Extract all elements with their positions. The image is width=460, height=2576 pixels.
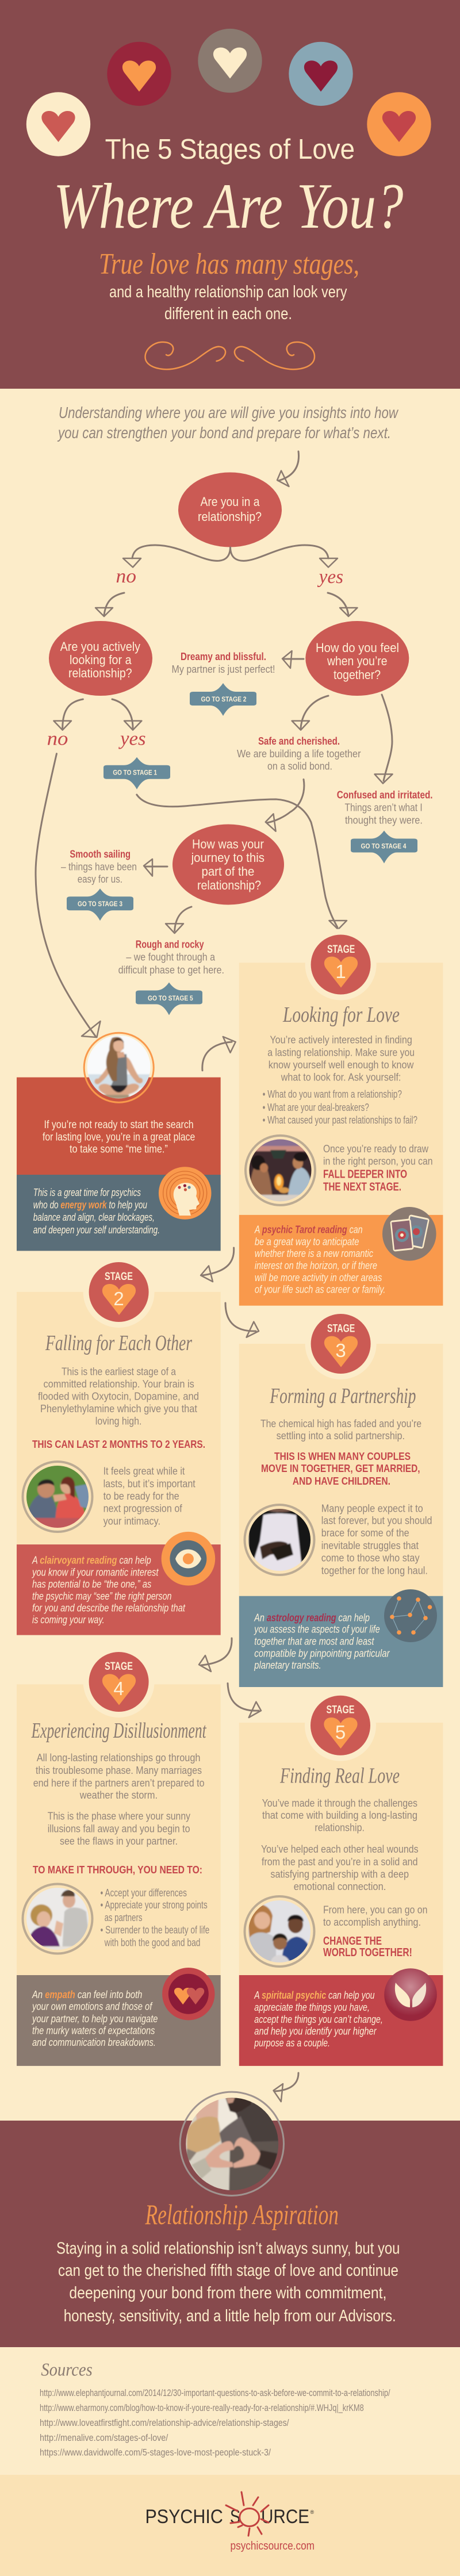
text: energy work: balance and align, clear blockages, xyxy=(33,1212,155,1223)
text: stage 2 intro: Phenylethylamine which give you that xyxy=(40,1402,197,1414)
logo: psychic source xyxy=(145,2492,315,2552)
flow question: how do you feel: How do you feel xyxy=(316,641,399,655)
stage badge 3 xyxy=(305,1308,377,1379)
list: source urls: http://www.eharmony.com/blog/how-to-know-if-youre-really-ready-for-a-relationship/#.WHJq|_krKM8 xyxy=(40,2403,364,2413)
text: stage 2 intro: committed relationship. Your brain is xyxy=(44,1378,194,1390)
list: source urls: http://menalive.com/stages-of-love/ xyxy=(40,2433,168,2443)
text: stage 4 intro: This is the phase where your sunny xyxy=(48,1810,191,1822)
flow question: actively looking: Are you actively xyxy=(60,639,140,654)
logo: psychic source: PSYCHIC xyxy=(145,2506,223,2528)
text: tarot reading: of your life such as career or family. xyxy=(255,1284,385,1295)
panel: stage 3 forming a partnership xyxy=(239,1308,443,1687)
text: empath: the murky waters of expectations xyxy=(32,2025,155,2037)
text: stage 4 intro: All long-lasting relationships go through xyxy=(37,1751,201,1764)
text: fall deeper: Once you’re ready to draw xyxy=(323,1143,429,1155)
text: fall deeper: in the right person, you can xyxy=(323,1155,433,1167)
icon: tarot cards xyxy=(382,1207,436,1261)
answer: rough and rocky: difficult phase to get here. xyxy=(118,964,224,976)
text: stage 4 intro xyxy=(33,1751,205,1847)
label: yes: yes xyxy=(317,566,343,588)
text: stage 1 intro: know yourself well enough to know xyxy=(269,1059,414,1071)
badge: go to stage 2 xyxy=(190,683,256,716)
header panel xyxy=(0,0,460,389)
heading: finding real love: Finding Real Love xyxy=(279,1764,400,1788)
callout: move in together xyxy=(261,1450,420,1487)
flow question: journey: How was your xyxy=(192,837,264,851)
arrow: actively yes xyxy=(112,699,141,730)
text: stage 2 intro: This is the earliest stage of a xyxy=(62,1365,177,1377)
list: source urls: https://www.davidwolfe.com/5-stages-love-most-people-stuck-3/ xyxy=(40,2448,271,2458)
text: me time: to take some “me time.” xyxy=(70,1143,168,1156)
badge: go to stage 1 xyxy=(103,757,170,789)
text: empath: An empath can feel into both xyxy=(32,1989,142,2000)
answer: dreamy and blissful: Dreamy and blissful. xyxy=(181,650,266,662)
arrow: stage 3 to stage 4 xyxy=(199,1638,232,1672)
text: stage 4 intro: this troublesome phase. Many marriages xyxy=(36,1764,202,1776)
text: stage 2 intro: loving high. xyxy=(95,1414,141,1427)
text: stage 5 intro: relationship. xyxy=(315,1822,365,1834)
stage badge 3: 3 xyxy=(335,1340,346,1361)
answer: smooth sailing: – things have been xyxy=(61,861,137,873)
list: source urls xyxy=(40,2388,390,2458)
text: stage 2 intro: flooded with Oxytocin, Dopamine, and xyxy=(38,1390,199,1402)
answer: smooth sailing: easy for us. xyxy=(78,873,122,885)
panel: relationship aspiration xyxy=(0,2092,460,2347)
text: stage 4 intro: illusions fall away and you begin to xyxy=(48,1822,190,1834)
icon: two hearts xyxy=(162,1968,214,2020)
logo: psychic source: psychicsource.com xyxy=(230,2540,315,2552)
text: stage 5 intro: that come with building a long-lasting xyxy=(262,1809,417,1821)
answer: rough and rocky: – we fought through a xyxy=(126,951,216,963)
text: stage 4 intro: weather the storm. xyxy=(79,1789,158,1801)
arrow: feel to safe xyxy=(292,696,328,730)
icon: heart badge crimson xyxy=(107,42,171,106)
icon: heart badge blue xyxy=(289,42,353,106)
logo: psychic source: S xyxy=(230,2506,240,2528)
callout: to make it through: TO MAKE IT THROUGH, YOU NEED TO: xyxy=(33,1864,202,1876)
callout: duration: THIS CAN LAST 2 MONTHS TO 2 YEARS. xyxy=(32,1438,205,1450)
heading: looking for love: Looking for Love xyxy=(282,1003,400,1027)
flow question: in a relationship: Are you in a xyxy=(200,494,260,509)
badge: go to stage 3: GO TO STAGE 3 xyxy=(78,901,122,908)
title: where are you: Where Are You? xyxy=(53,171,404,242)
label: yes second: yes xyxy=(118,729,146,750)
text: brace for struggles: inevitable struggles that xyxy=(321,1539,419,1551)
text: tarot reading: be a great way to anticipate xyxy=(255,1236,359,1248)
title: the 5 stages of love: The 5 Stages of Love xyxy=(105,134,355,165)
list: what you need to do: as partners xyxy=(105,1911,142,1923)
text: stage 5 intro: emotional connection. xyxy=(294,1880,386,1892)
stage badge 4: STAGE xyxy=(105,1661,133,1673)
flow question: actively looking: looking for a xyxy=(70,653,132,667)
answer: confused and irritated xyxy=(337,789,432,826)
text: empath xyxy=(31,1989,158,2048)
list: questions: • What do you want from a relationship? xyxy=(263,1088,402,1100)
badge: go to stage 5 xyxy=(136,982,202,1015)
arrow: actively no xyxy=(53,699,83,730)
list: source urls: http://www.loveatfirstfight.com/relationship-advice/relationship-stages/ xyxy=(40,2418,289,2428)
callout: move in together: MOVE IN TOGETHER, GET MARRIED, xyxy=(261,1462,420,1474)
text: aspiration: can get to the cherished fifth stage of love and continue xyxy=(58,2261,398,2280)
logo: psychic source: URCE xyxy=(261,2506,309,2528)
stage badge 1: STAGE xyxy=(327,944,355,956)
text: stage 3 intro xyxy=(260,1417,421,1442)
panel: stage 2 falling for each other xyxy=(17,1256,221,1635)
text: change the world: to accomplish anything. xyxy=(323,1916,421,1928)
text: feels great: It feels great while it xyxy=(103,1465,185,1477)
badge: go to stage 2: GO TO STAGE 2 xyxy=(201,696,246,703)
text: astrology reading: together that are most and least xyxy=(254,1636,374,1647)
flow question: journey: part of the xyxy=(201,864,254,879)
text: me time xyxy=(43,1118,195,1156)
text: clairvoyant reading xyxy=(31,1554,186,1626)
text: stage 1 intro: You’re actively interested in finding xyxy=(270,1034,412,1046)
icon: third eye xyxy=(162,1532,215,1586)
text: change the world: CHANGE THE xyxy=(323,1935,382,1948)
list: what you need to do: with both the good and bad xyxy=(104,1936,200,1948)
text: spiritual psychic: purpose as a couple. xyxy=(254,2037,330,2049)
stage badge 2 xyxy=(83,1256,155,1328)
text: stage 5 intro: satisfying partnership with a deep xyxy=(270,1868,409,1880)
subtitle text xyxy=(109,283,347,323)
text: energy work xyxy=(33,1187,160,1236)
text: astrology reading: compatible by pinpointing particular xyxy=(254,1647,390,1659)
flow question: in a relationship: relationship? xyxy=(198,509,262,524)
stage badge 3: STAGE xyxy=(327,1322,355,1335)
arrow: journey to smooth xyxy=(144,859,167,876)
label: no second: no xyxy=(47,729,68,750)
subtitle text: different in each one. xyxy=(164,305,292,323)
text: me time: If you’re not ready to start the search xyxy=(44,1118,194,1131)
text: stage 1 intro: a lasting relationship. Make sure you xyxy=(267,1046,415,1058)
text: brace for struggles: come to those who stay xyxy=(321,1552,420,1564)
panel: sources xyxy=(40,2359,390,2458)
photo: arguing couple xyxy=(23,1884,92,1954)
text: stage 5 intro: You’ve made it through the challenges xyxy=(262,1797,417,1809)
answer: dreamy and blissful xyxy=(171,650,275,675)
text: clairvoyant reading: the psychic may “see” the right person xyxy=(32,1590,171,1602)
text: empath: and communication breakdowns. xyxy=(32,2037,156,2048)
icon: heart badge cream xyxy=(26,92,90,156)
text: clairvoyant reading: for you and describe the relationship that xyxy=(32,1602,186,1613)
photo: happy family xyxy=(245,1896,314,1966)
arrow: yes to feeling xyxy=(328,593,358,616)
answer: confused and irritated: Confused and irritated. xyxy=(337,789,432,801)
icon: angel wings xyxy=(384,1968,437,2021)
text: spiritual psychic: and help you identify your higher xyxy=(254,2026,377,2037)
callout: move in together: THIS IS WHEN MANY COUPLES xyxy=(274,1450,411,1462)
text: stage 1 intro xyxy=(267,1034,415,1083)
subtitle: true love: True love has many stages, xyxy=(99,248,359,281)
stage badge 1: 1 xyxy=(335,961,346,982)
list: questions: • What are your deal-breakers? xyxy=(263,1101,369,1113)
text: feels great: your intimacy. xyxy=(103,1515,160,1527)
answer: confused and irritated: thought they were. xyxy=(345,814,423,826)
photo: heart hands couple xyxy=(180,2092,283,2195)
list: what you need to do xyxy=(100,1887,209,1948)
text: stage 5 intro: from the past and you’re in a solid and xyxy=(262,1856,417,1868)
stage badge 5 xyxy=(305,1690,376,1761)
arrow: stage 1 to stage 2 xyxy=(201,1248,234,1282)
text: stage 3 intro: The chemical high has faded and you’re xyxy=(260,1417,421,1429)
text: tarot reading: A psychic Tarot reading can xyxy=(254,1224,363,1235)
subtitle text: and a healthy relationship can look very xyxy=(109,283,347,301)
icon: heart badge grey xyxy=(198,29,262,93)
text: astrology reading: you assess the aspects of your life xyxy=(254,1624,380,1635)
stage badge 5: STAGE xyxy=(327,1704,354,1716)
stage badge 1 xyxy=(305,929,377,1000)
flourish xyxy=(145,342,315,369)
arrow: stage 3 to stage 5 xyxy=(228,1684,261,1718)
text: clairvoyant reading: you know if your romantic interest xyxy=(31,1567,159,1578)
arrow: no to looking xyxy=(95,593,124,616)
icon: heart badge orange xyxy=(367,92,431,156)
answer: dreamy and blissful: My partner is just perfect! xyxy=(171,663,275,675)
stage badge 2: 2 xyxy=(113,1288,124,1309)
answer: safe and cherished: on a solid bond. xyxy=(267,760,332,772)
answer: rough and rocky: Rough and rocky xyxy=(136,938,204,950)
arrow: journey to rough xyxy=(166,907,191,933)
stage badge 5: 5 xyxy=(335,1722,346,1743)
answer: safe and cherished: Safe and cherished. xyxy=(258,735,340,747)
panel: stage 4 experiencing disillusionment xyxy=(17,1646,221,2066)
callout: move in together: AND HAVE CHILDREN. xyxy=(293,1475,390,1487)
text: energy work: and deepen your self understanding. xyxy=(33,1224,160,1236)
badge: go to stage 3 xyxy=(67,888,133,921)
text: empath: your partner, to help you navigate xyxy=(31,2013,158,2025)
text: change the world: From here, you can go on xyxy=(323,1903,427,1916)
text: aspiration: honesty, sensitivity, and a little help from our Advisors. xyxy=(64,2307,396,2325)
heading: falling for each other: Falling for Each Other xyxy=(45,1331,192,1355)
flow question: actively looking: relationship? xyxy=(68,666,132,680)
text: tarot reading: will be more activity in other areas xyxy=(255,1272,382,1283)
text: aspiration: deepening your bond from there with commitment, xyxy=(69,2284,386,2302)
panel: footer logo xyxy=(0,2475,460,2576)
text: fall deeper: FALL DEEPER INTO xyxy=(323,1168,407,1181)
badge: go to stage 1: GO TO STAGE 1 xyxy=(113,769,158,776)
heading: experiencing disillusionment: Experiencing Disillusionment xyxy=(31,1719,207,1743)
text: energy work: This is a great time for psychics xyxy=(33,1187,141,1198)
list: questions xyxy=(263,1088,417,1126)
arrow: feel to dreamy xyxy=(282,651,304,668)
text: aspiration: Staying in a solid relationship isn’t always sunny, but you xyxy=(56,2240,400,2258)
text: clairvoyant reading: A clairvoyant reading can help xyxy=(32,1554,151,1566)
text: stage 5 intro xyxy=(261,1797,419,1892)
arrow: feel to confused xyxy=(375,695,393,783)
panel: me time xyxy=(17,1033,221,1251)
badge: go to stage 4: GO TO STAGE 4 xyxy=(361,844,407,850)
answer: rough and rocky xyxy=(118,938,224,976)
text: spiritual psychic: A spiritual psychic can help you xyxy=(254,1989,375,2001)
text: stage 5 intro: You’ve helped each other heal wounds xyxy=(261,1843,419,1855)
label: no: no xyxy=(116,566,136,587)
arrow: stage 1 long connector xyxy=(137,795,347,929)
text: spiritual psychic xyxy=(254,1989,383,2049)
text: stage 1 intro: what to look for. Ask yourself: xyxy=(281,1071,401,1083)
text: astrology reading xyxy=(254,1612,390,1671)
icon: constellation xyxy=(384,1589,437,1642)
text: tarot reading: interest on the horizon, or if there xyxy=(255,1260,377,1271)
text: stage 4 intro: end here if the partners aren’t prepared to xyxy=(33,1777,205,1789)
logo: psychic source: ® xyxy=(310,2509,314,2515)
answer: smooth sailing xyxy=(61,848,137,885)
stage badge 2: STAGE xyxy=(105,1271,133,1283)
photo: couple at candlelit dinner xyxy=(246,1136,315,1205)
badge: go to stage 5: GO TO STAGE 5 xyxy=(148,995,193,1002)
text: empath: your own emotions and those of xyxy=(31,2001,153,2012)
photo: picnic couple xyxy=(23,1462,92,1532)
text: astrology reading: An astrology reading can help xyxy=(254,1612,370,1623)
heading: relationship aspiration: Relationship Aspiration xyxy=(145,2198,339,2230)
arrow: no to me time xyxy=(36,754,100,1037)
arrow: stage 2 to stage 3 xyxy=(225,1303,259,1337)
intro text xyxy=(57,404,398,442)
panel: stage 1 looking for love xyxy=(239,929,443,1306)
text: change the world: WORLD TOGETHER! xyxy=(323,1946,412,1959)
text: tarot reading xyxy=(254,1224,385,1295)
text: change the world xyxy=(323,1903,427,1959)
text: brace for struggles: brace for some of the xyxy=(321,1527,409,1539)
text: feels great: lasts, but it’s important xyxy=(103,1477,195,1489)
flow question: journey: relationship? xyxy=(197,878,261,892)
flow question: actively looking xyxy=(49,621,152,696)
text: brace for struggles: Many people expect it to xyxy=(321,1502,423,1514)
text: clairvoyant reading: is coming your way. xyxy=(32,1614,105,1626)
answer: safe and cherished xyxy=(237,735,361,772)
text: brace for struggles xyxy=(321,1502,432,1577)
flow question: journey xyxy=(172,825,284,905)
text: feels great: next progression of xyxy=(103,1502,183,1515)
text: aspiration xyxy=(56,2240,400,2325)
text: spiritual psychic: accept the things you can’t change, xyxy=(254,2014,383,2025)
text: stage 2 intro xyxy=(38,1365,199,1427)
arrow: stage 5 to aspiration xyxy=(274,2073,298,2102)
stage badge 4: 4 xyxy=(113,1678,124,1699)
arrow: intro to first question xyxy=(277,451,299,486)
flow question: how do you feel: when you’re xyxy=(327,654,388,668)
arrow: branch no and yes xyxy=(123,545,338,567)
answer: confused and irritated: Things aren’t what I xyxy=(345,802,423,814)
flow question: how do you feel: together? xyxy=(334,668,381,682)
answer: smooth sailing: Smooth sailing xyxy=(70,848,131,860)
text: spiritual psychic: appreciate the things you have, xyxy=(254,2002,370,2013)
icon: energy head xyxy=(159,1167,212,1220)
text: brace for struggles: together for the long haul. xyxy=(321,1564,428,1577)
text: astrology reading: planetary transits. xyxy=(254,1659,321,1671)
panel: stage 5 finding real love xyxy=(239,1690,443,2066)
text: stage 4 intro: see the flaws in your partner. xyxy=(60,1835,178,1847)
list: what you need to do: • Accept your differences xyxy=(100,1887,187,1899)
flow question: journey: journey to this xyxy=(191,850,264,865)
text: brace for struggles: last forever, but you should xyxy=(321,1515,432,1527)
flow question: in a relationship xyxy=(178,473,282,547)
photo: wedding couple xyxy=(245,1505,314,1575)
photo: meditating woman xyxy=(84,1033,154,1102)
text: stage 3 intro: settling into a solid partnership. xyxy=(277,1429,405,1442)
heading: sources: Sources xyxy=(41,2359,93,2380)
flow question: how do you feel xyxy=(305,621,409,696)
text: tarot reading: whether there is a new romantic xyxy=(255,1248,373,1259)
text: fall deeper xyxy=(323,1143,433,1194)
arrow: me time to stage 1 xyxy=(202,1037,236,1071)
text: energy work: who do energy work to help you xyxy=(33,1199,147,1210)
badge: go to stage 4 xyxy=(351,830,417,864)
list: what you need to do: • Appreciate your strong points xyxy=(100,1899,208,1911)
text: feels great: to be ready for the xyxy=(103,1490,179,1502)
answer: safe and cherished: We are building a life together xyxy=(237,747,361,760)
text: fall deeper: THE NEXT STAGE. xyxy=(323,1181,401,1194)
stage badge 4 xyxy=(83,1646,155,1718)
arrow: safe to journey xyxy=(266,779,304,831)
list: what you need to do: • Surrender to the beauty of life xyxy=(100,1924,209,1935)
text: clairvoyant reading: has potential to be “the one,” as xyxy=(32,1578,151,1590)
text: me time: for lasting love, you’re in a great place xyxy=(43,1131,195,1144)
text: feels great xyxy=(103,1465,195,1527)
